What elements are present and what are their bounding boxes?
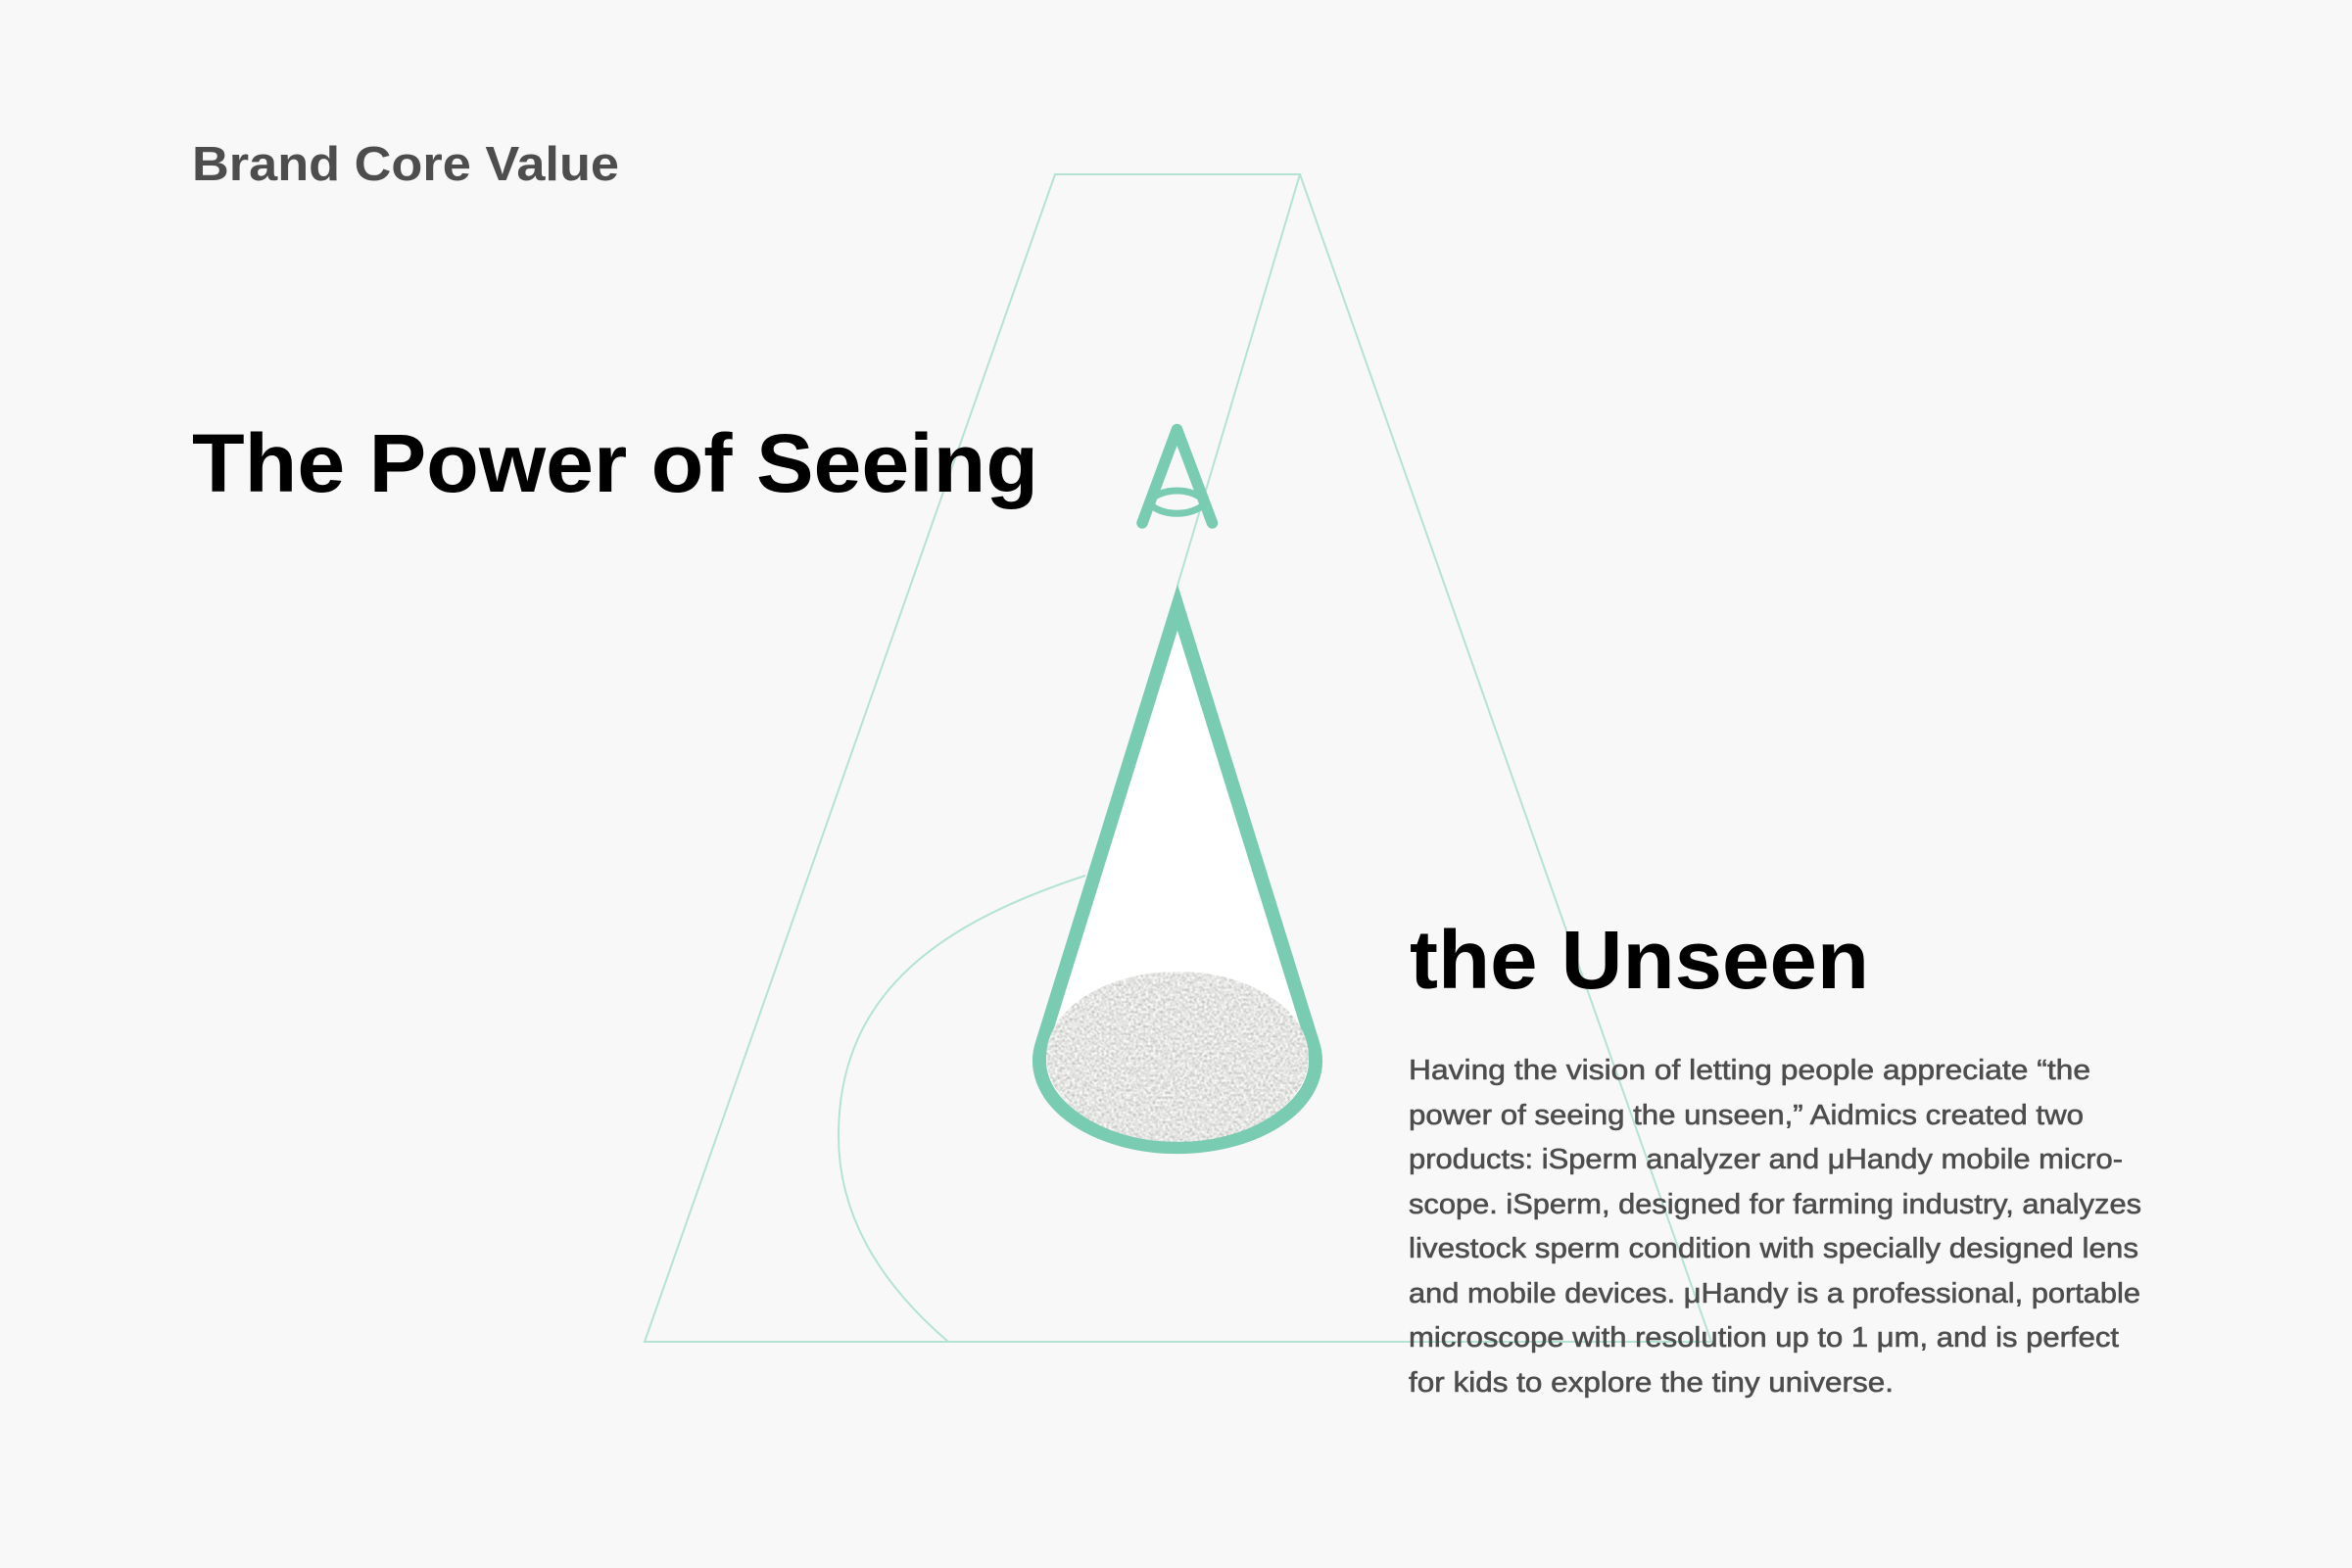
headline part one: The Power of Seeing bbox=[192, 417, 1038, 509]
body paragraph: and mobile devices. μHandy is a professional, portable bbox=[1409, 1278, 2140, 1309]
headline part two: the Unseen bbox=[1410, 914, 1869, 1006]
sand texture specimen ellipse bbox=[1046, 972, 1309, 1142]
body paragraph: livestock sperm condition with specially designed lens bbox=[1409, 1233, 2138, 1264]
body paragraph: Having the vision of letting people appreciate “the bbox=[1409, 1055, 2090, 1086]
body paragraph: scope. iSperm, designed for farming industry, analyzes bbox=[1409, 1189, 2141, 1220]
body paragraph: power of seeing the unseen,” Aidmics created two bbox=[1409, 1100, 2084, 1131]
body paragraph: microscope with resolution up to 1 μm, and is perfect bbox=[1409, 1322, 2119, 1354]
body paragraph bbox=[1409, 1055, 2141, 1399]
large outline letter A construction lines bbox=[645, 174, 1711, 1342]
body paragraph: products: iSperm analyzer and μHandy mobile micro- bbox=[1409, 1144, 2123, 1175]
cone with lens outline bbox=[1039, 607, 1316, 1147]
section label: Brand Core Value bbox=[192, 138, 619, 191]
body paragraph: for kids to explore the tiny universe. bbox=[1409, 1367, 1894, 1399]
small A logo icon with lens bbox=[1142, 429, 1213, 523]
